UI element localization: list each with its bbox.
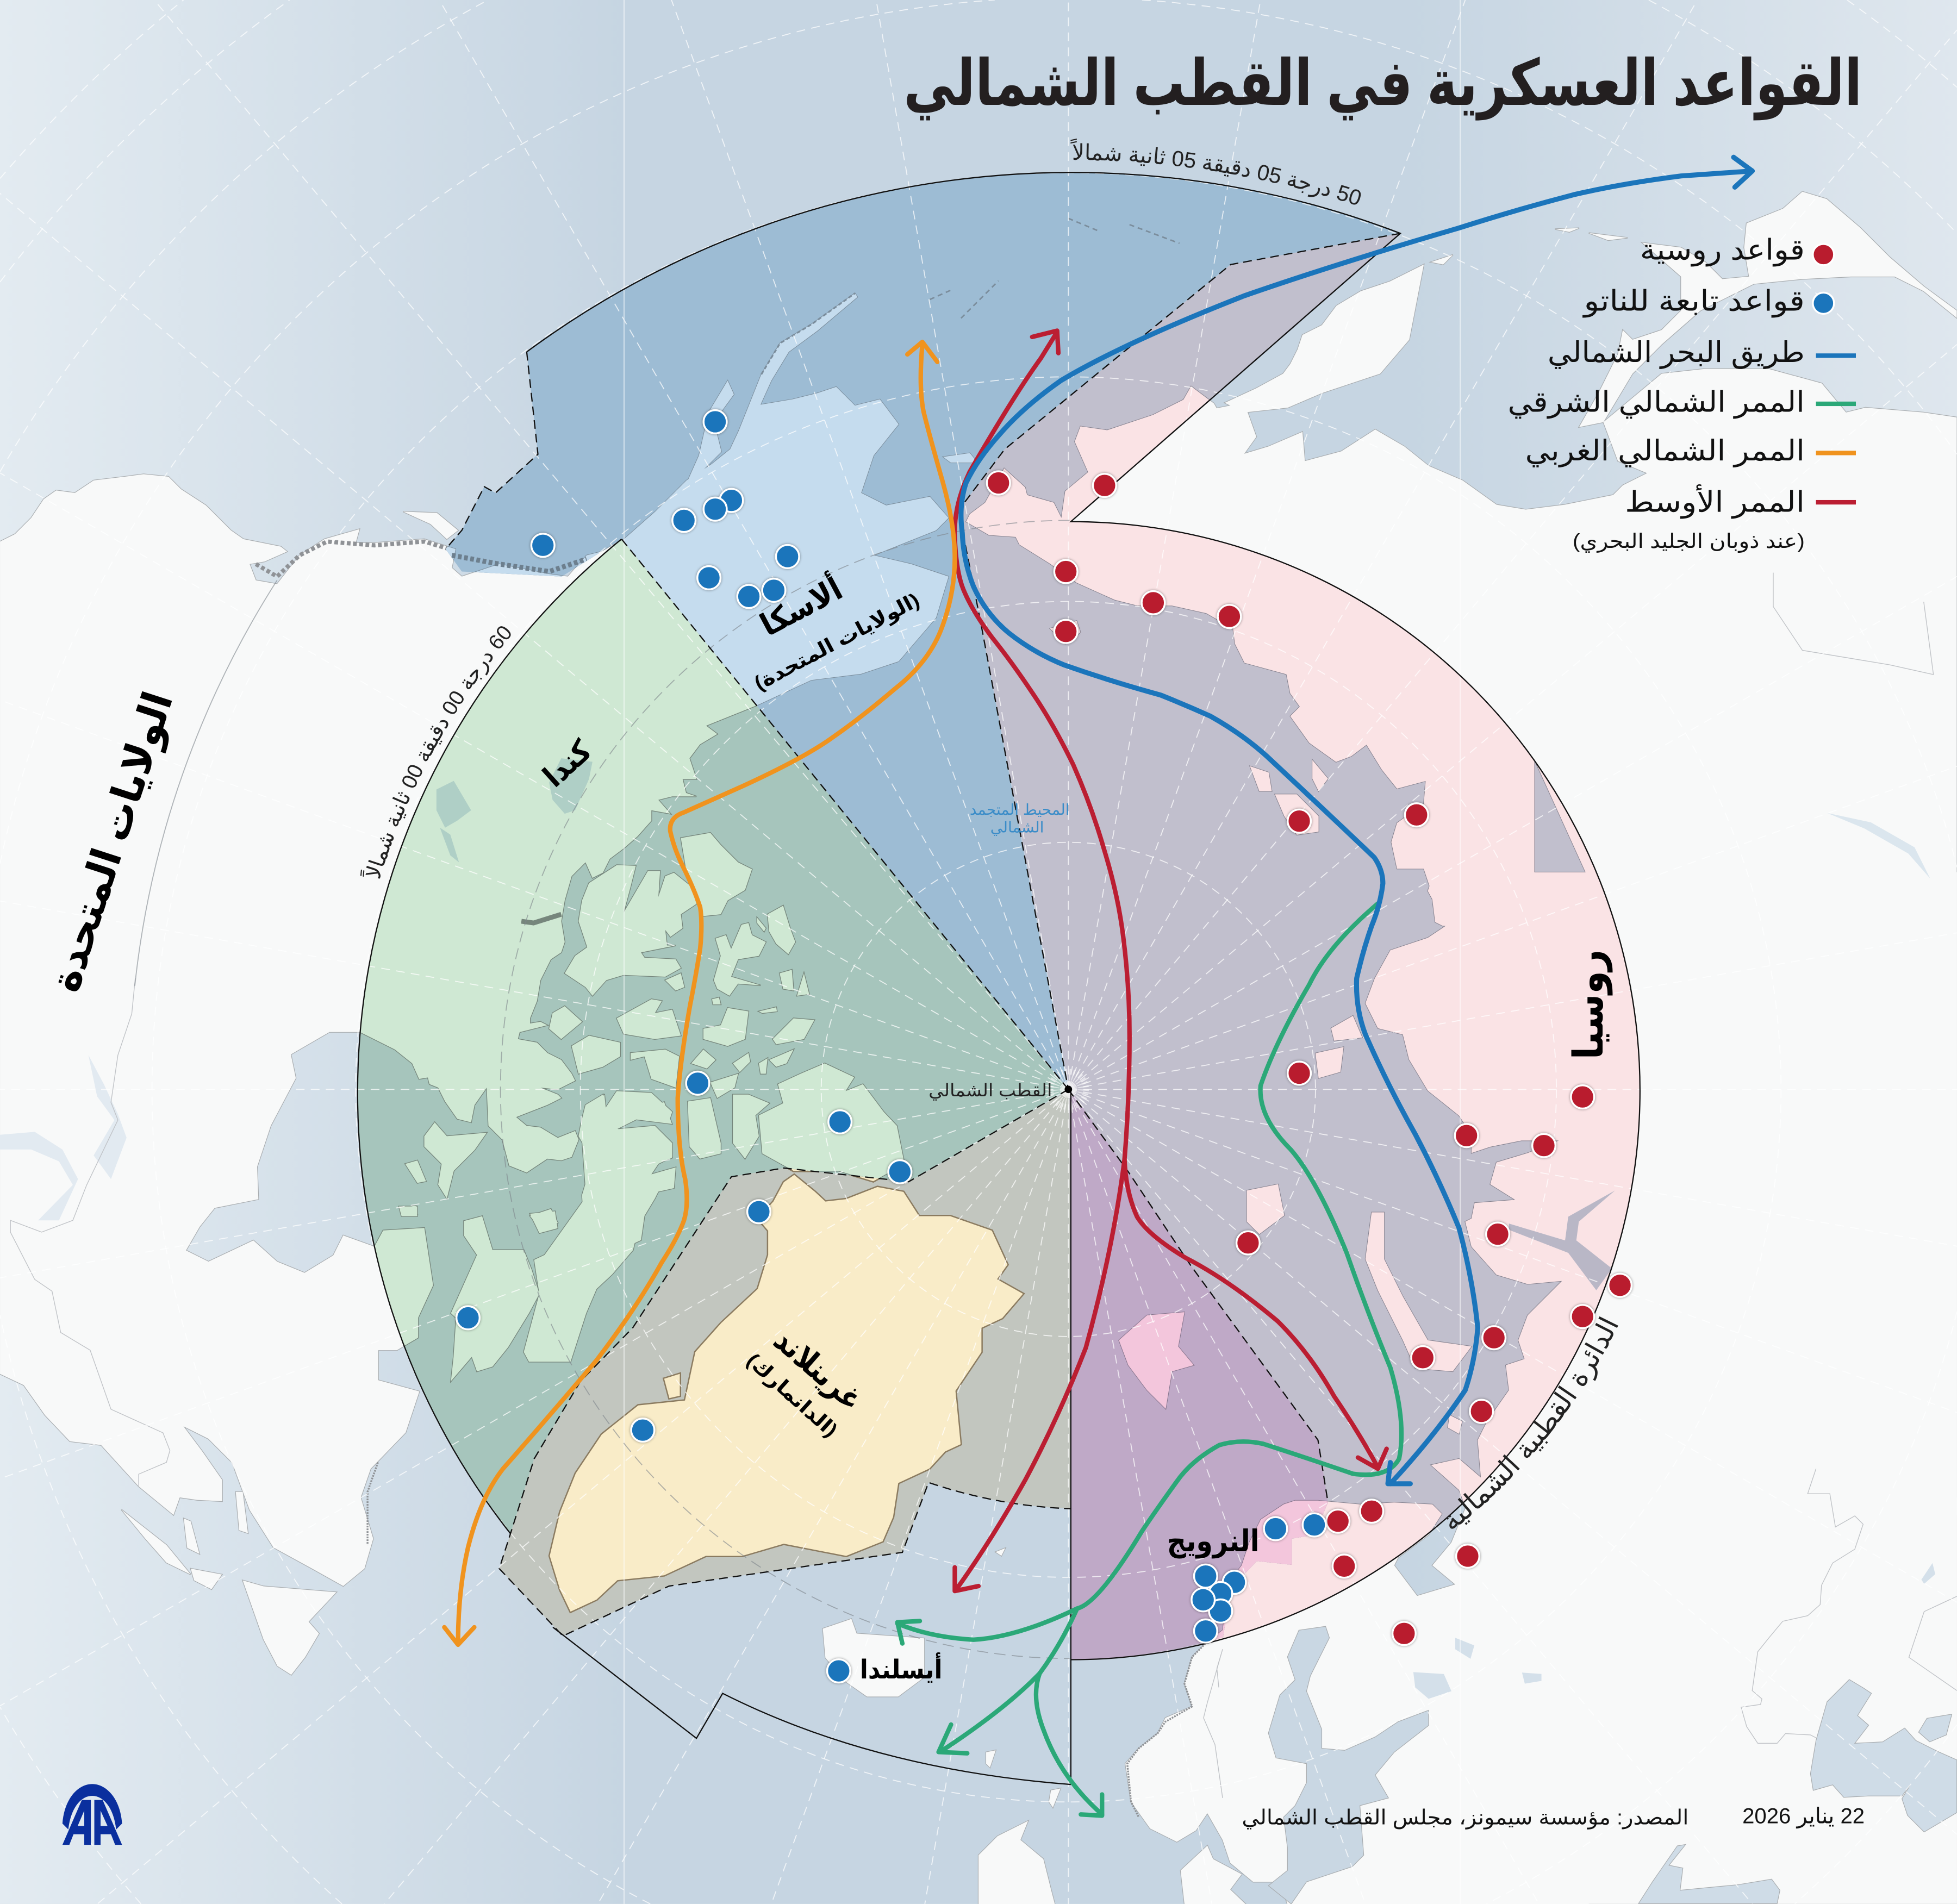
label: Alaska: ألاسكا: [753, 569, 848, 643]
source: المصدر: مؤسسة سيمونز، مجلس القطب الشمالي: [1242, 1807, 1688, 1830]
panel: Canada Arctic zone: [358, 540, 1065, 1532]
markers: Russian bases: [987, 471, 1631, 1645]
panel: Greenland (Denmark) zone: [499, 1092, 1070, 1636]
legend: [1507, 234, 1856, 553]
legend: Northeast passage: الممر الشمالي الشرقي: [1507, 386, 1805, 419]
label: Arctic Circle: الدائرة القطبية الشمالية: [1446, 1316, 1618, 1529]
label: Denmark: (الدانمارك): [742, 1349, 842, 1442]
legend: Russian bases: قواعد روسية: [1640, 234, 1805, 267]
panel: Norway Arctic zone: [1070, 1095, 1328, 1659]
legend: Northwest passage: الممر الشمالي الغربي: [1525, 435, 1805, 467]
icon: North Pole point: [1064, 1085, 1072, 1093]
label: Greenland: غرينلاند: [766, 1322, 869, 1418]
label: 60 degrees arc: 60 درجة 00 دقيقة 00 ثانية شمالاً: [360, 626, 511, 879]
label: Alaska United States: (الولايات المتحدة): [751, 589, 923, 695]
route: Central passage (red): [955, 330, 1387, 1591]
route: Northwest passage (orange): [444, 342, 955, 1645]
label: 50 degrees arc: 50 درجة 05 دقيقة 05 ثانية شمالاً: [1070, 138, 1361, 204]
legend: note: (عند ذوبان الجليد البحري): [1573, 530, 1805, 553]
label: Arctic Ocean: المحيط المتجمد: [970, 801, 1070, 818]
route: Northeast passage (green): [898, 903, 1401, 1815]
label: Canada: كندا: [537, 733, 599, 794]
label: Arctic Ocean: [970, 801, 1070, 836]
label: Iceland: أيسلندا: [860, 1652, 942, 1684]
zone boundary lines: [358, 172, 1640, 1784]
label: North Pole: القطب الشمالي: [928, 1081, 1052, 1101]
jagged outer coastlines: [256, 541, 1207, 1817]
markers: NATO bases: [457, 410, 1326, 1683]
route: Northern Sea Route (blue): [961, 157, 1752, 1484]
legend: Central passage: [1625, 484, 1856, 519]
panel: Russia Arctic zone: [963, 235, 1640, 1656]
label: Norway: النرويج: [1167, 1524, 1260, 1559]
icon: AA logo: [63, 1784, 122, 1845]
date: 22 يناير 2026: [1742, 1803, 1865, 1828]
label: Russia: روسيا: [1566, 950, 1613, 1059]
legend: Central passage: الممر الأوسط: [1625, 484, 1805, 519]
panel: Alaska / United States Arctic zone: [446, 173, 1398, 1086]
label: Arctic Ocean: الشمالي: [990, 819, 1044, 836]
country borders on outer land: [10, 573, 1957, 1798]
legend: NATO bases: قواعد تابعة للناتو: [1582, 285, 1805, 318]
label: United States: الولايات المتحدة: [41, 686, 183, 997]
legend: Northern Sea Route: طريق البحر الشمالي: [1548, 336, 1805, 369]
